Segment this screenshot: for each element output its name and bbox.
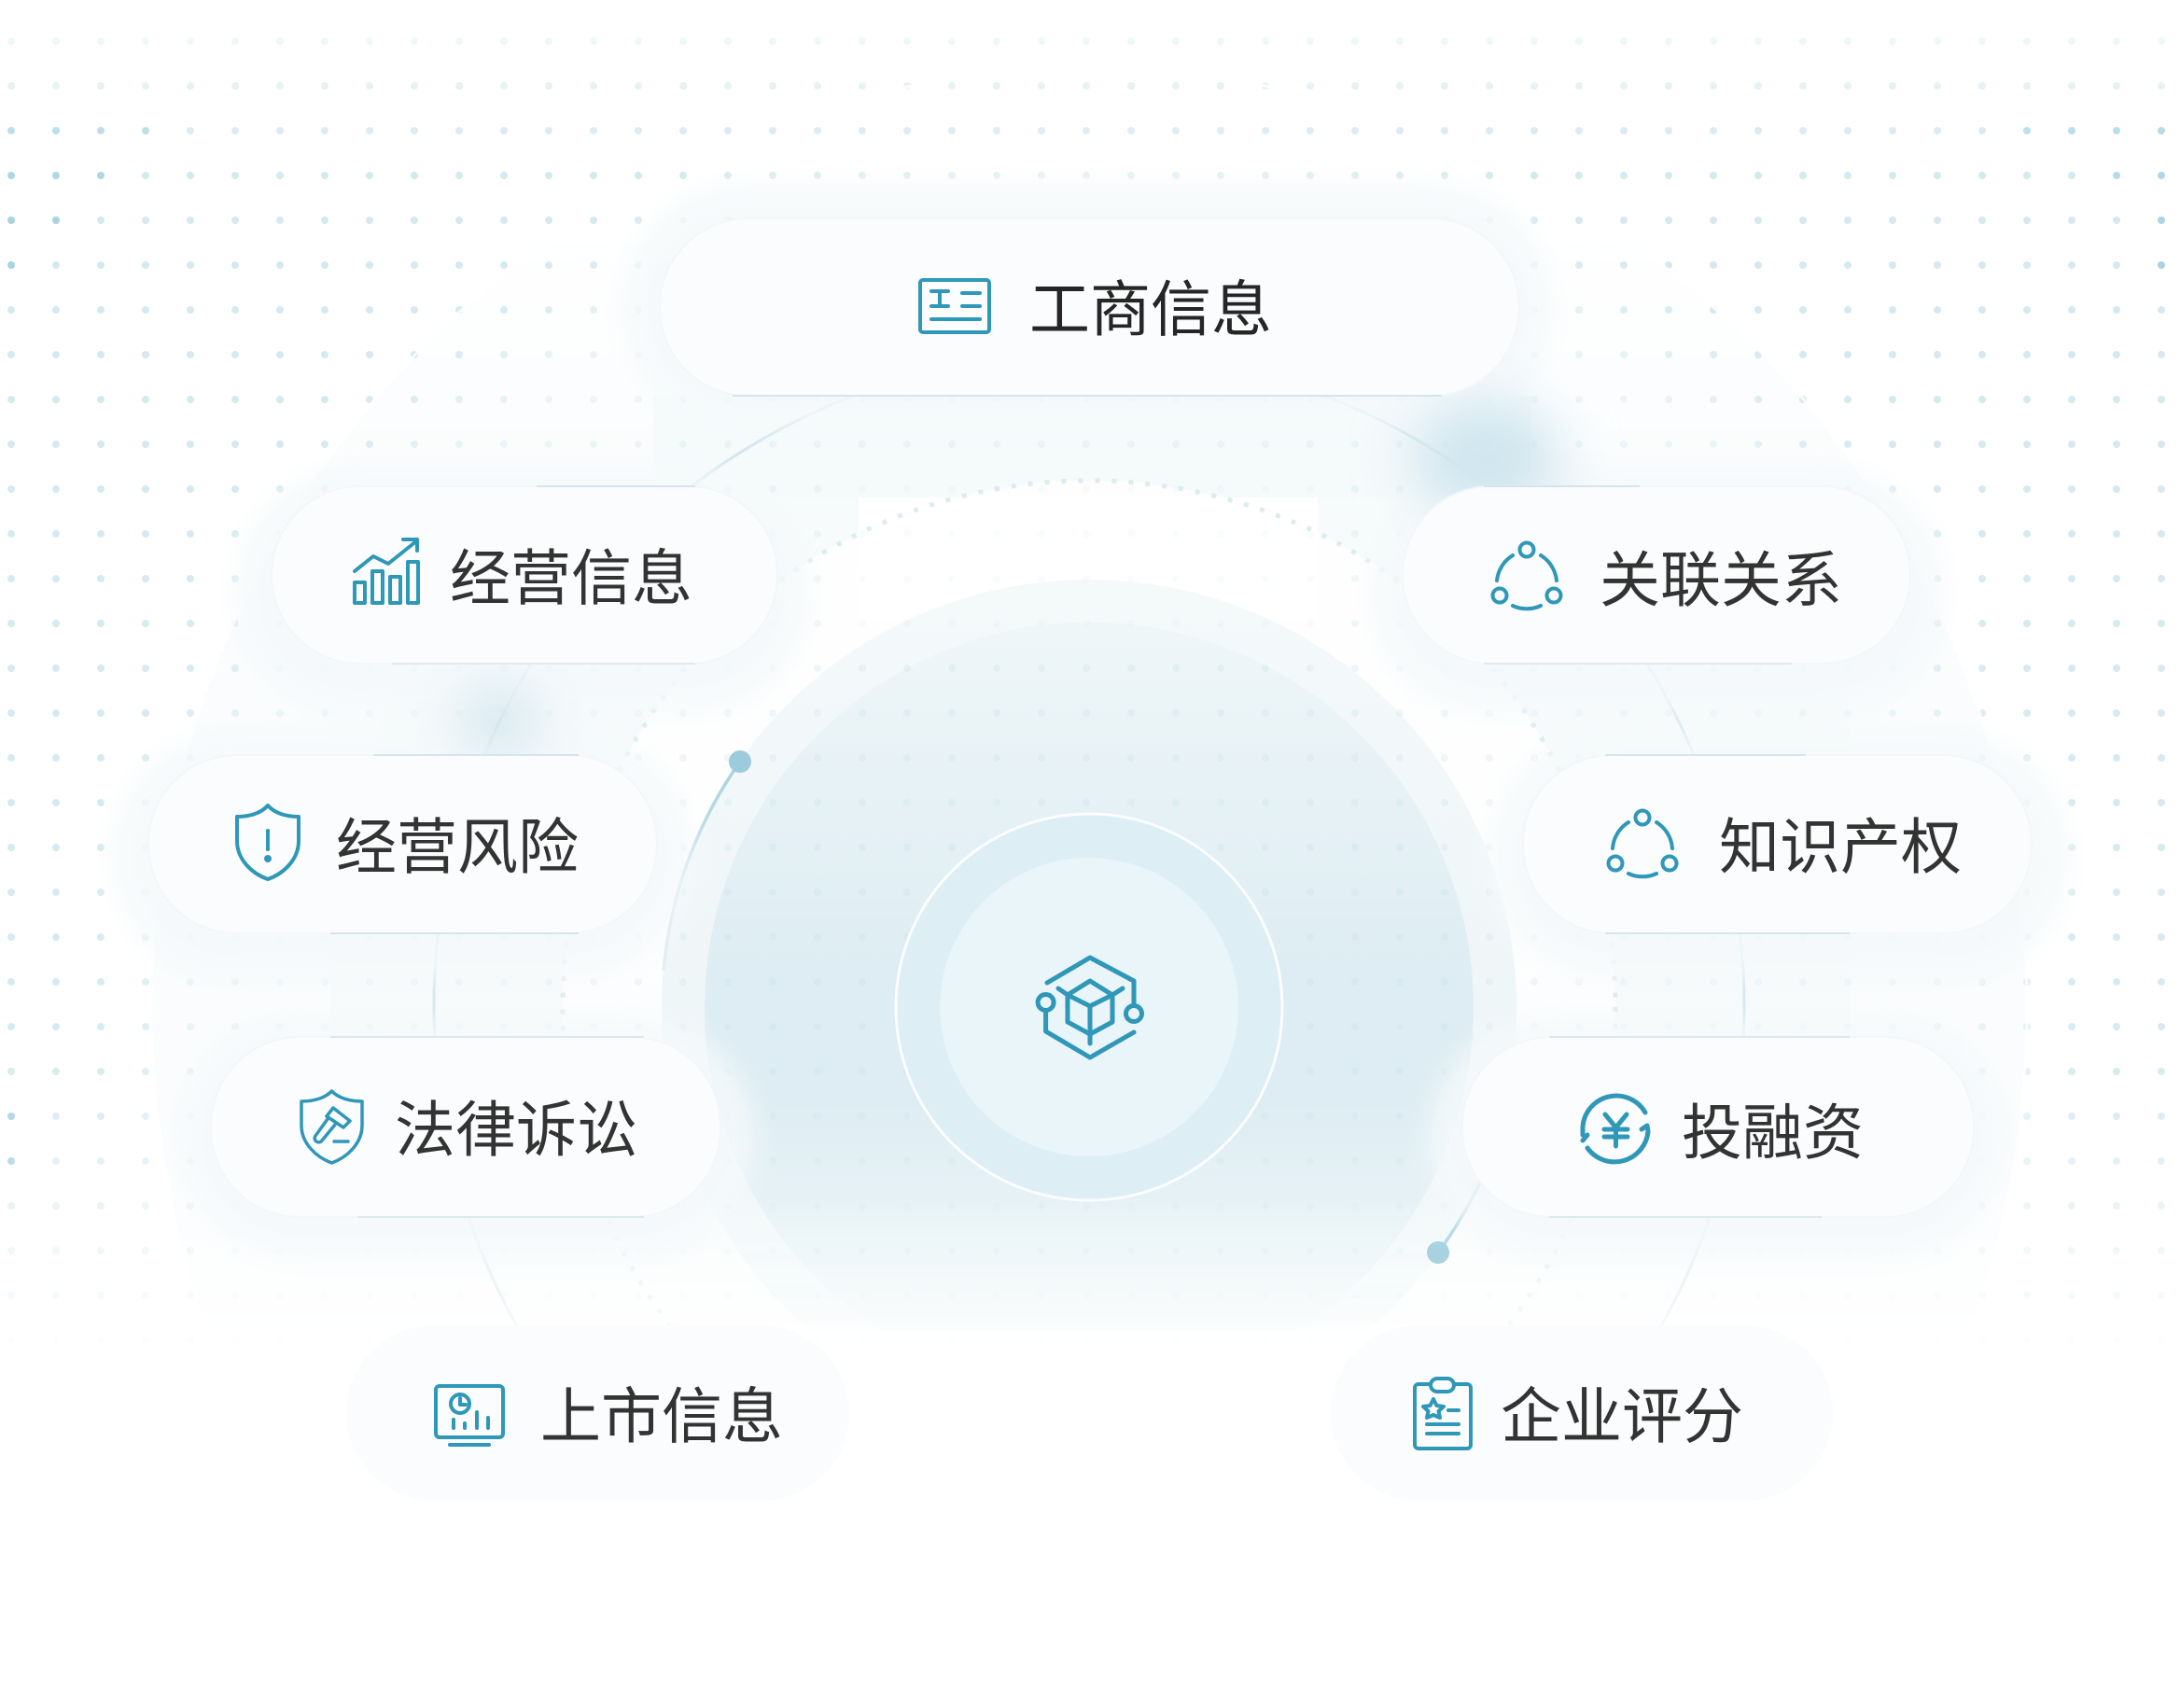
- pill: 投融资: [1462, 1037, 1974, 1217]
- label: 关联关系: [1600, 546, 1842, 614]
- label: 经营信息: [450, 544, 692, 612]
- pill: 上市信息: [346, 1325, 849, 1501]
- label: 知识产权: [1719, 813, 1962, 881]
- icon: gavel shield: [301, 1091, 362, 1163]
- pill: 法律诉讼: [211, 1037, 720, 1217]
- outer orbit ring: [231, 84, 2029, 1075]
- icon: network: [1609, 810, 1676, 876]
- orbit rings: [231, 84, 2029, 1325]
- central disc: [662, 580, 1516, 1284]
- icon: warning shield: [237, 805, 299, 879]
- label: 经营风险: [336, 813, 579, 881]
- darker accent dots: [7, 127, 2165, 1165]
- glow blob upper right: [1411, 402, 1560, 514]
- label: 企业评分: [1501, 1382, 1743, 1450]
- dotted orbit ring: [560, 478, 1618, 1322]
- central circle: [896, 814, 1282, 1200]
- soft haze behind diagram: [632, 726, 1550, 737]
- central inner circle: [940, 858, 1238, 1156]
- icon: clipboard star: [1415, 1379, 1471, 1449]
- icon: network: [1493, 543, 1560, 609]
- white cap above disc: [563, 481, 1615, 1533]
- pill: 经营信息: [272, 486, 777, 664]
- accent arc left with node: [664, 750, 751, 971]
- pill: 工商信息: [660, 218, 1519, 396]
- icon: growth bars: [355, 539, 418, 603]
- icon: id card: [920, 280, 989, 332]
- icon: monitor chart: [436, 1386, 503, 1445]
- pill: 经营风险: [148, 755, 657, 933]
- label: 法律诉讼: [395, 1096, 637, 1164]
- pill: 企业评分: [1331, 1325, 1833, 1501]
- icon: yen cycle: [1583, 1096, 1648, 1162]
- central outer ring: [896, 814, 1282, 1200]
- pill: 关联关系: [1403, 486, 1910, 664]
- label: 工商信息: [1029, 275, 1272, 343]
- dot grid background: [7, 37, 2165, 1299]
- label: 上市信息: [540, 1382, 783, 1450]
- label: 投融资: [1682, 1099, 1864, 1167]
- middle orbit ring: [433, 413, 1745, 1325]
- glow blob left: [460, 690, 538, 753]
- pale band below top pill: [653, 396, 1530, 498]
- pill halos: [110, 182, 2072, 1260]
- accent arc right with node: [1427, 1174, 1484, 1264]
- pill: 知识产权: [1523, 755, 2032, 933]
- icon: cube graduation cap: [1038, 958, 1142, 1057]
